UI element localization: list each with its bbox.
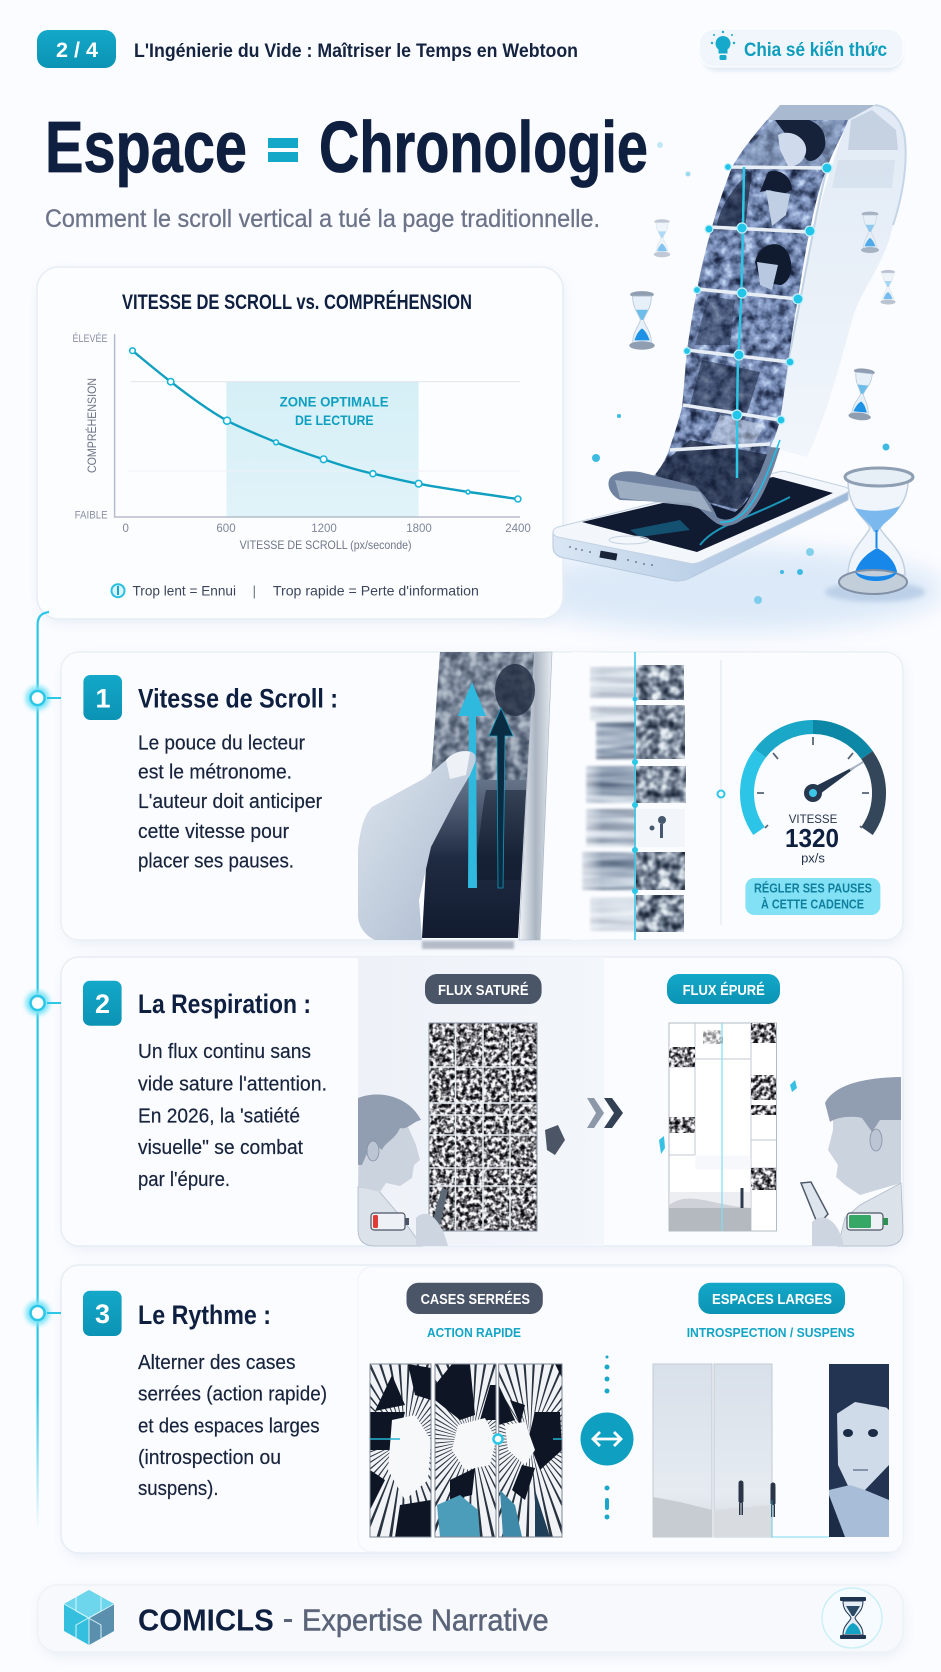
- number badge: 3: [95, 1299, 110, 1329]
- footer brand: COMICLS: [138, 1603, 274, 1638]
- number badge: [83, 675, 122, 720]
- saturated flow pill: [425, 974, 542, 1004]
- body text: En 2026, la 'satiété: [138, 1106, 300, 1128]
- panel: step 1 scroll speed: [61, 652, 904, 949]
- axis labels: [72, 332, 531, 552]
- tight panels pill: CASES SERRÉES: [421, 1291, 530, 1308]
- axis labels: 0: [122, 523, 129, 535]
- header series title: L'Ingénierie du Vide : Maîtriser le Temps en Webtoon: [134, 40, 578, 62]
- wide empty panels: [653, 1364, 829, 1537]
- scroll axis: [737, 167, 744, 478]
- body text: placer ses pauses.: [138, 851, 294, 873]
- callout: pacing: [745, 878, 880, 915]
- axis labels: VITESSE DE SCROLL (px/seconde): [240, 538, 412, 552]
- icon: light bulb: [711, 31, 735, 60]
- icon: hourglass in ring: [822, 1588, 882, 1648]
- legend: [112, 583, 479, 599]
- body text: suspens).: [138, 1478, 218, 1500]
- phone and hand: [430, 1188, 448, 1232]
- legend: |: [252, 583, 256, 599]
- axis labels: ÉLEVÉE: [72, 332, 108, 345]
- speed gauge: VITESSE: [789, 814, 838, 826]
- body text: [138, 732, 322, 873]
- action panels: [370, 1364, 562, 1538]
- hair: [358, 1094, 421, 1165]
- strip front with panels: [654, 120, 848, 512]
- pill: knowledge sharing tag: Chia sé kiến thức: [744, 40, 887, 61]
- chevron arrow: [587, 1098, 623, 1128]
- clean flow pill: FLUX ÉPURÉ: [683, 982, 765, 999]
- body text: serrées (action rapide): [138, 1384, 327, 1406]
- subtitle: Comment le scroll vertical a tué la page traditionnelle.: [45, 205, 600, 233]
- ear: [870, 1129, 882, 1151]
- film roll at base: [608, 447, 780, 526]
- panel a: [370, 1364, 430, 1536]
- legend: Trop lent = Ennui: [132, 583, 236, 599]
- separator dots: [604, 1356, 610, 1520]
- axis labels: 2400: [505, 523, 531, 535]
- pill: knowledge sharing tag: [699, 29, 903, 71]
- body text: visuelle" se combat: [138, 1137, 303, 1159]
- main title: [45, 108, 648, 188]
- node 2: [26, 991, 61, 1015]
- panel b: [436, 1364, 496, 1536]
- phone with thumb: [358, 652, 552, 949]
- body text: [138, 1352, 327, 1500]
- axis labels: 600: [216, 523, 236, 535]
- body text: est le métronome.: [138, 762, 292, 784]
- number badge: 2: [95, 989, 110, 1019]
- battery low: [371, 1213, 409, 1230]
- curve: [132, 351, 518, 499]
- axis nodes: [684, 163, 832, 424]
- saturated flow pill: FLUX SATURÉ: [438, 982, 529, 999]
- sublabels: ACTION RAPIDE: [427, 1325, 521, 1340]
- number badge: [83, 981, 122, 1026]
- panel: step 2 breathing: [61, 957, 904, 1250]
- clean flow pill: [667, 974, 780, 1004]
- zone label: DE LECTURE: [295, 412, 374, 428]
- heading: La Respiration :: [138, 989, 311, 1019]
- callout: pacing: RÉGLER SES PAUSES: [754, 880, 872, 896]
- face: [828, 1100, 901, 1195]
- saturated panel grid: [429, 1023, 565, 1231]
- axis labels: 1800: [406, 523, 432, 535]
- header badge: page number: 2 / 4: [56, 39, 98, 62]
- sublabels: INTROSPECTION / SUSPENS: [687, 1325, 855, 1340]
- grid lines: [131, 381, 520, 383]
- axes: [115, 334, 520, 517]
- speed gauge: 1320: [785, 823, 839, 853]
- timeline nodes: [26, 686, 61, 1325]
- number badge: 1: [95, 684, 111, 714]
- body text: (introspection ou: [138, 1447, 281, 1469]
- coat: [838, 1183, 903, 1246]
- axis labels: COMPRÉHENSION: [84, 378, 99, 473]
- particles: [592, 142, 890, 604]
- speed gauge: [747, 727, 879, 866]
- body text: vide sature l'attention.: [138, 1074, 327, 1096]
- body text: cette vitesse pour: [138, 821, 289, 843]
- number badge: [83, 1291, 122, 1336]
- translucent back of the strip: [770, 105, 906, 457]
- node 1: [26, 686, 61, 710]
- arrow up cyan: [458, 682, 486, 888]
- large hourglass: [825, 468, 925, 602]
- axis labels: FAIBLE: [75, 510, 108, 522]
- panel c: [499, 1364, 562, 1536]
- body text: L'auteur doit anticiper: [138, 791, 322, 813]
- body text: Alterner des cases: [138, 1352, 296, 1374]
- body text: et des espaces larges: [138, 1416, 320, 1438]
- person right with full battery: [801, 1077, 903, 1246]
- panel: step 3 rhythm: [61, 1265, 904, 1558]
- body text: Un flux continu sans: [138, 1041, 311, 1063]
- footer bar: [38, 1585, 903, 1656]
- node 3: [26, 1301, 61, 1325]
- speed gauge: px/s: [801, 851, 825, 866]
- heading: Vitesse de Scroll :: [138, 684, 338, 714]
- hand: [358, 751, 476, 940]
- clean panels: [659, 1023, 797, 1231]
- callout: pacing: À CETTE CADENCE: [761, 896, 864, 912]
- main title: Chronologie: [319, 108, 648, 188]
- footer brand: Expertise Narrative: [302, 1603, 549, 1638]
- panel dividers: [670, 167, 827, 450]
- body text: [138, 1041, 327, 1191]
- tight panels pill: [406, 1283, 543, 1314]
- hero illustration: webtoon strip rising from phone: [553, 105, 925, 604]
- icon: cube logo: [64, 1590, 114, 1645]
- person left with low battery: [358, 1094, 448, 1246]
- zone label: ZONE OPTIMALE: [280, 394, 389, 410]
- wide spaces pill: ESPACES LARGES: [712, 1292, 832, 1308]
- optimal zone: [226, 382, 419, 517]
- chart title: VITESSE DE SCROLL vs. COMPRÉHENSION: [122, 291, 472, 314]
- body text: par l'épure.: [138, 1169, 230, 1191]
- icon: two way arrow: [580, 1412, 634, 1466]
- footer brand: [138, 1603, 549, 1638]
- heading: Le Rythme :: [138, 1300, 271, 1330]
- panel: chart card: [37, 267, 563, 622]
- timeline: [38, 612, 49, 1530]
- face panel: [829, 1364, 889, 1537]
- motion-blurred webtoon strip: [572, 652, 686, 940]
- hair: [825, 1077, 901, 1132]
- coat: [358, 1187, 422, 1246]
- legend: Trop rapide = Perte d'information: [273, 583, 479, 599]
- axis labels: 1200: [311, 523, 337, 535]
- main title: Espace: [45, 108, 247, 188]
- sublabels: [427, 1325, 855, 1340]
- battery full: [847, 1213, 888, 1230]
- ground glow under the phone: [515, 548, 941, 632]
- ear: [367, 1141, 379, 1161]
- face: [358, 1110, 420, 1192]
- top fold: [767, 105, 875, 120]
- floating hourglasses: [629, 212, 896, 421]
- phone and hand: [801, 1182, 828, 1225]
- curve markers: [130, 348, 521, 502]
- phone: [553, 471, 849, 581]
- arrow up dark: [489, 708, 513, 888]
- header badge: page number: [37, 30, 116, 68]
- wide spaces pill: [698, 1283, 845, 1314]
- zone label: [280, 394, 389, 428]
- body text: Le pouce du lecteur: [138, 732, 305, 754]
- divider with node: [718, 660, 724, 925]
